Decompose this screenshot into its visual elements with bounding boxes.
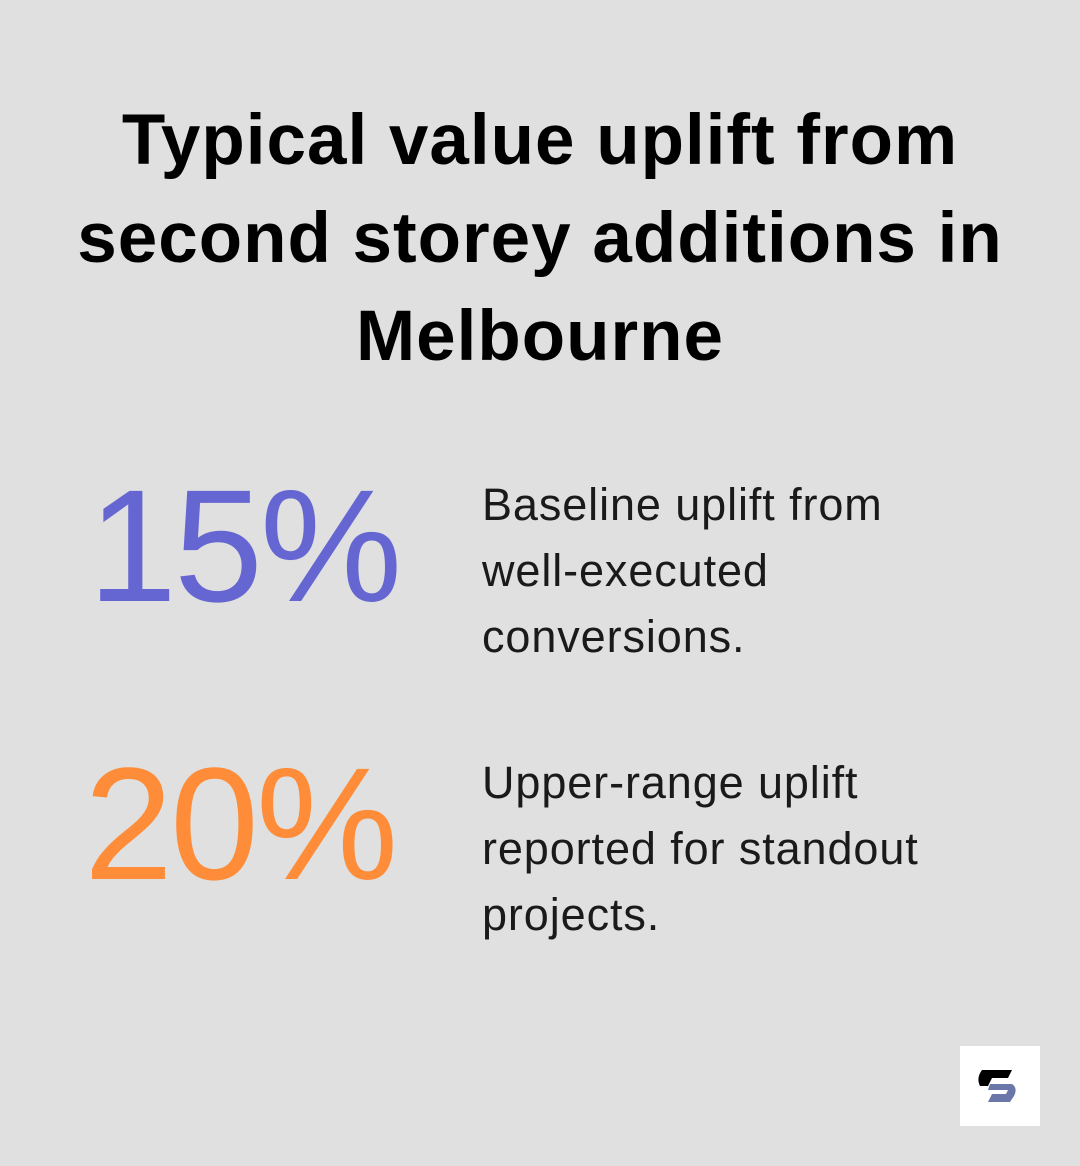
text: upper range: Upper-range uplift: [482, 757, 858, 808]
text: upper range: [482, 757, 919, 940]
title: second storey additions in: [77, 199, 1003, 278]
text: baseline: Baseline uplift from: [482, 479, 883, 530]
text: upper range: projects.: [482, 889, 660, 940]
title: Typical value uplift from: [122, 101, 958, 180]
text: upper range: reported for standout: [482, 823, 919, 874]
text: baseline: well-executed: [482, 545, 769, 596]
title: [77, 101, 1003, 376]
logo: [960, 1046, 1040, 1126]
stat: 20%: 20%: [84, 734, 395, 913]
title: Melbourne: [356, 297, 724, 376]
text: baseline: [482, 479, 883, 662]
stat: 15%: 15%: [88, 456, 399, 635]
text: baseline: conversions.: [482, 611, 745, 662]
